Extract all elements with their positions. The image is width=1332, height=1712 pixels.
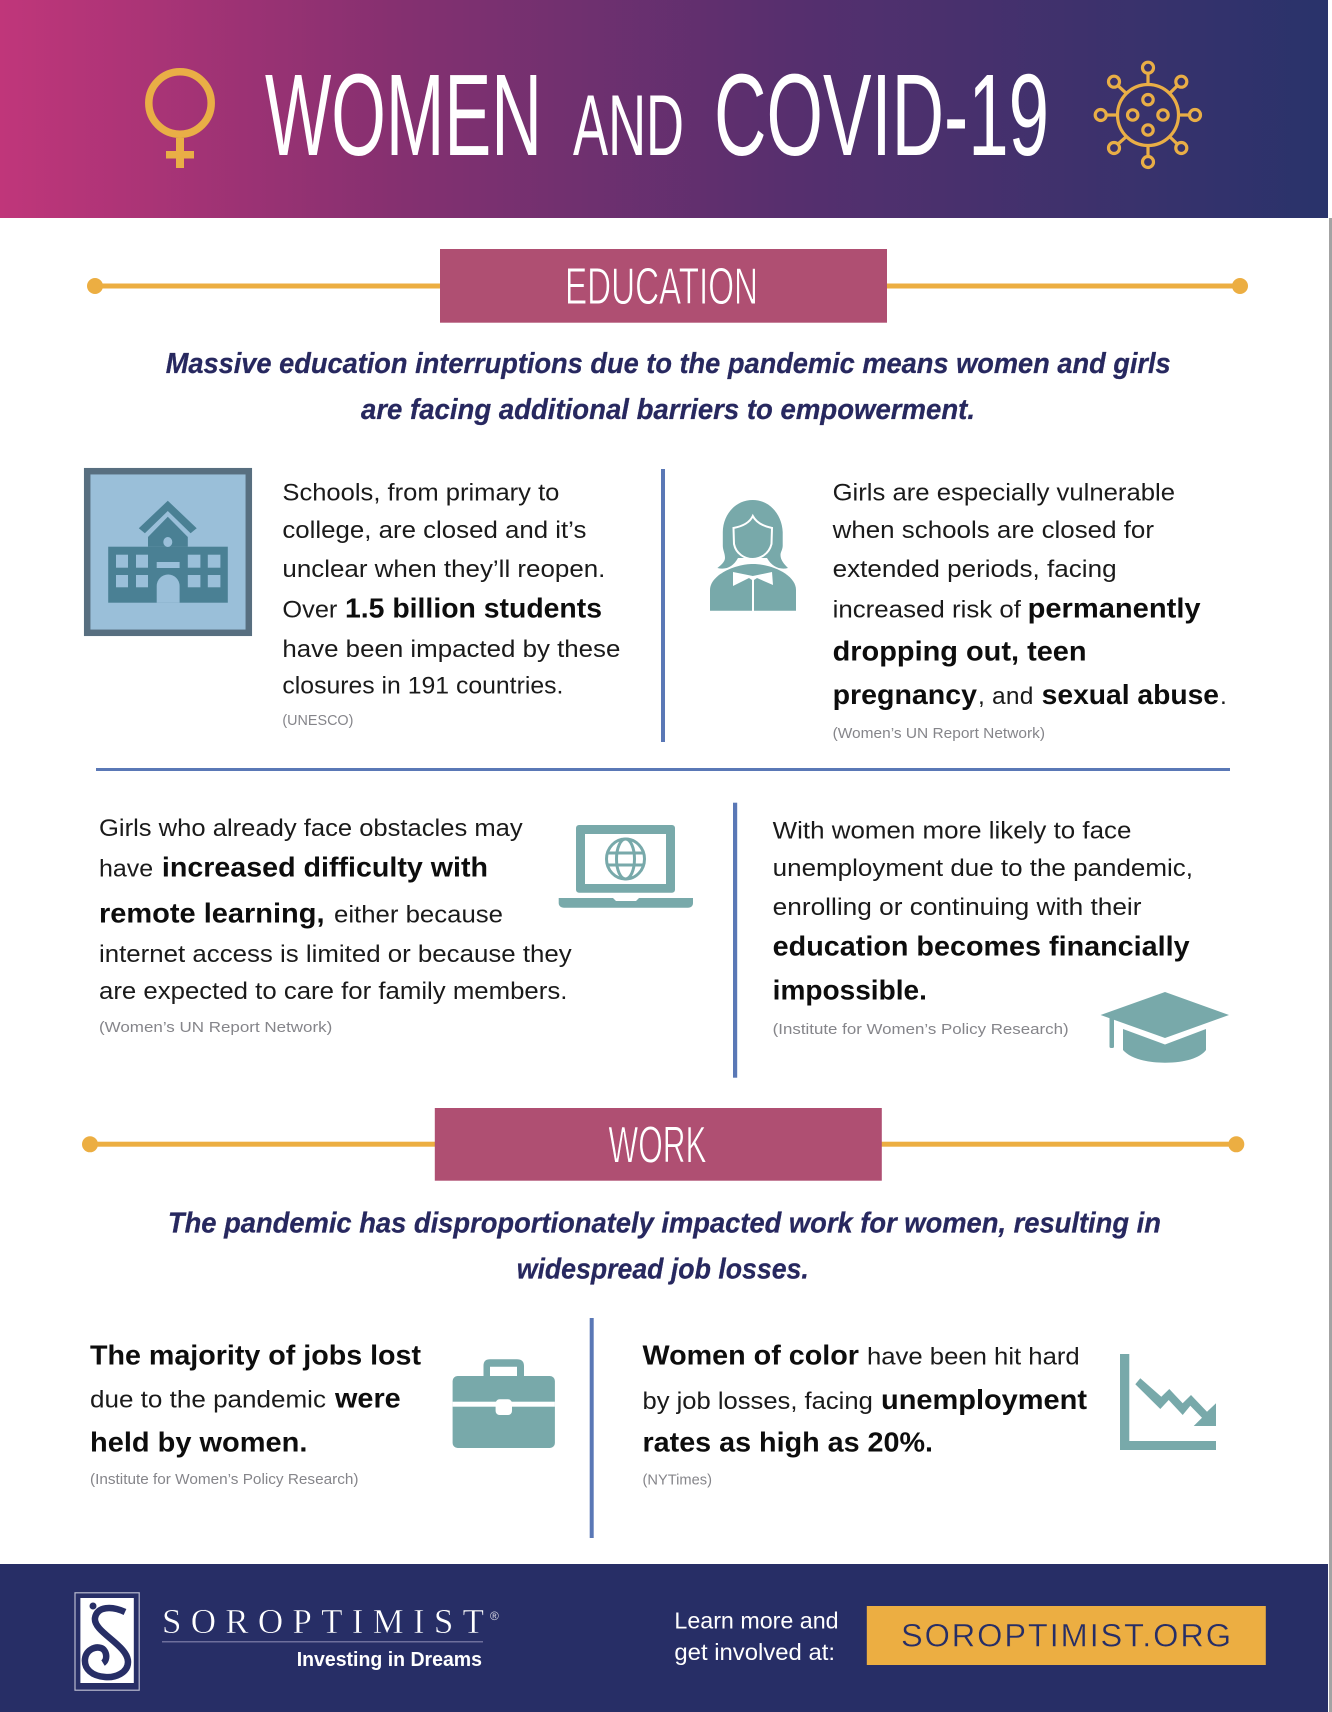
- text: women of color: unemployment: [881, 1384, 1087, 1415]
- section divider: work: WORK: [608, 1117, 707, 1175]
- title: AND: [573, 78, 684, 174]
- text: schools closed: unclear when they’ll reopen.: [282, 556, 605, 583]
- logo wordmark: SOROPTIMIST: [162, 1602, 484, 1641]
- section divider: education: EDUCATION: [565, 258, 758, 316]
- logo mark: [75, 1593, 139, 1690]
- text: girls vulnerable: [832, 480, 1227, 742]
- text: education financially impossible: [773, 818, 1193, 1038]
- education subheading: [166, 348, 1171, 426]
- text: women of color: Women of color: [642, 1339, 859, 1370]
- text: remote learning: Girls who already face obstacles may: [99, 815, 523, 842]
- text: remote learning: remote learning,: [99, 898, 324, 929]
- text: remote learning: internet access is limited or because they: [99, 941, 572, 968]
- text: education financially impossible: enrolling or continuing with their: [773, 894, 1142, 921]
- website button: SOROPTIMIST.ORG: [901, 1618, 1231, 1654]
- header banner: [0, 0, 1328, 218]
- logo wordmark: [162, 1602, 499, 1671]
- work subheading: widespread job losses.: [517, 1254, 809, 1286]
- title: [265, 50, 1049, 180]
- text: schools closed: college, are closed and it’s: [282, 517, 586, 544]
- text: majority of jobs lost: were: [334, 1383, 401, 1414]
- text: girls vulnerable: (Women’s UN Report Network): [833, 725, 1045, 742]
- text: remote learning: increased difficulty with: [162, 852, 488, 882]
- text: women of color: rates as high as 20%.: [642, 1427, 933, 1458]
- text: schools closed: Schools, from primary to: [282, 480, 559, 507]
- text: education financially impossible: impossible.: [773, 975, 927, 1006]
- text: majority of jobs lost: (Institute for Women’s Policy Research): [90, 1471, 359, 1488]
- work subheading: [168, 1208, 1161, 1286]
- text: schools closed: Over: [282, 597, 337, 624]
- text: girls vulnerable: dropping out, teen: [833, 636, 1087, 667]
- icon: laptop: [559, 825, 693, 908]
- text: girls vulnerable: , and: [978, 683, 1033, 710]
- text: women of color: by job losses, facing: [642, 1388, 873, 1415]
- icon: female symbol: [149, 72, 211, 168]
- text: schools closed: have been impacted by these: [282, 636, 620, 663]
- call to action text: get involved at:: [674, 1639, 835, 1665]
- text: girls vulnerable: .: [1220, 683, 1227, 710]
- icon: briefcase: [453, 1359, 555, 1448]
- education subheading: Massive education interruptions due to the pandemic means women and girls: [166, 348, 1171, 380]
- text: education financially impossible: unemployment due to the pandemic,: [773, 855, 1193, 882]
- text: girls vulnerable: permanently: [1028, 593, 1201, 624]
- text: remote learning: [99, 815, 572, 1036]
- text: majority of jobs lost: [90, 1339, 421, 1488]
- work subheading: The pandemic has disproportionately impacted work for women, resulting in: [168, 1208, 1161, 1240]
- text: majority of jobs lost: The majority of jobs lost: [90, 1339, 421, 1370]
- text: girls vulnerable: pregnancy: [833, 679, 978, 710]
- text: majority of jobs lost: due to the pandemic: [90, 1387, 326, 1414]
- text: remote learning: are expected to care for family members.: [99, 978, 567, 1005]
- website button: [867, 1606, 1266, 1665]
- section divider: education: [87, 249, 1248, 323]
- icon: declining chart: [1120, 1354, 1216, 1450]
- logo wordmark: ®: [490, 1609, 499, 1623]
- text: girls vulnerable: extended periods, facing: [833, 556, 1117, 583]
- text: women of color: have been hit hard: [867, 1343, 1080, 1370]
- section divider: work: [82, 1108, 1244, 1181]
- text: remote learning: (Women’s UN Report Network): [99, 1019, 332, 1036]
- call to action text: [674, 1608, 839, 1665]
- icon: virus: [1095, 62, 1200, 168]
- text: women of color: (NYTimes): [642, 1471, 712, 1488]
- icon: school: [87, 471, 249, 633]
- icon: graduation cap: [1101, 992, 1229, 1063]
- text: girls vulnerable: Girls are especially vulnerable: [833, 480, 1175, 507]
- text: remote learning: have: [99, 856, 153, 882]
- icon: girl: [710, 500, 796, 611]
- text: girls vulnerable: sexual abuse: [1042, 679, 1219, 710]
- text: majority of jobs lost: held by women.: [90, 1427, 307, 1458]
- text: girls vulnerable: increased risk of: [833, 597, 1021, 624]
- text: education financially impossible: With women more likely to face: [773, 818, 1131, 845]
- logo wordmark: Investing in Dreams: [297, 1649, 482, 1671]
- text: schools closed: [282, 480, 620, 729]
- title: COVID-19: [714, 50, 1049, 180]
- education subheading: are facing additional barriers to empowerment.: [361, 394, 975, 426]
- footer: [0, 1564, 1328, 1712]
- text: schools closed: (UNESCO): [282, 712, 353, 729]
- text: remote learning: either because: [334, 902, 503, 929]
- text: women of color: [642, 1339, 1087, 1488]
- text: education financially impossible: (Institute for Women’s Policy Research): [773, 1021, 1069, 1038]
- text: girls vulnerable: when schools are closed for: [832, 517, 1154, 544]
- title: WOMEN: [265, 50, 542, 180]
- text: education financially impossible: education becomes financially: [773, 931, 1190, 962]
- text: schools closed: closures in 191 countries.: [282, 673, 563, 700]
- call to action text: Learn more and: [674, 1608, 839, 1634]
- text: schools closed: 1.5 billion students: [345, 593, 602, 624]
